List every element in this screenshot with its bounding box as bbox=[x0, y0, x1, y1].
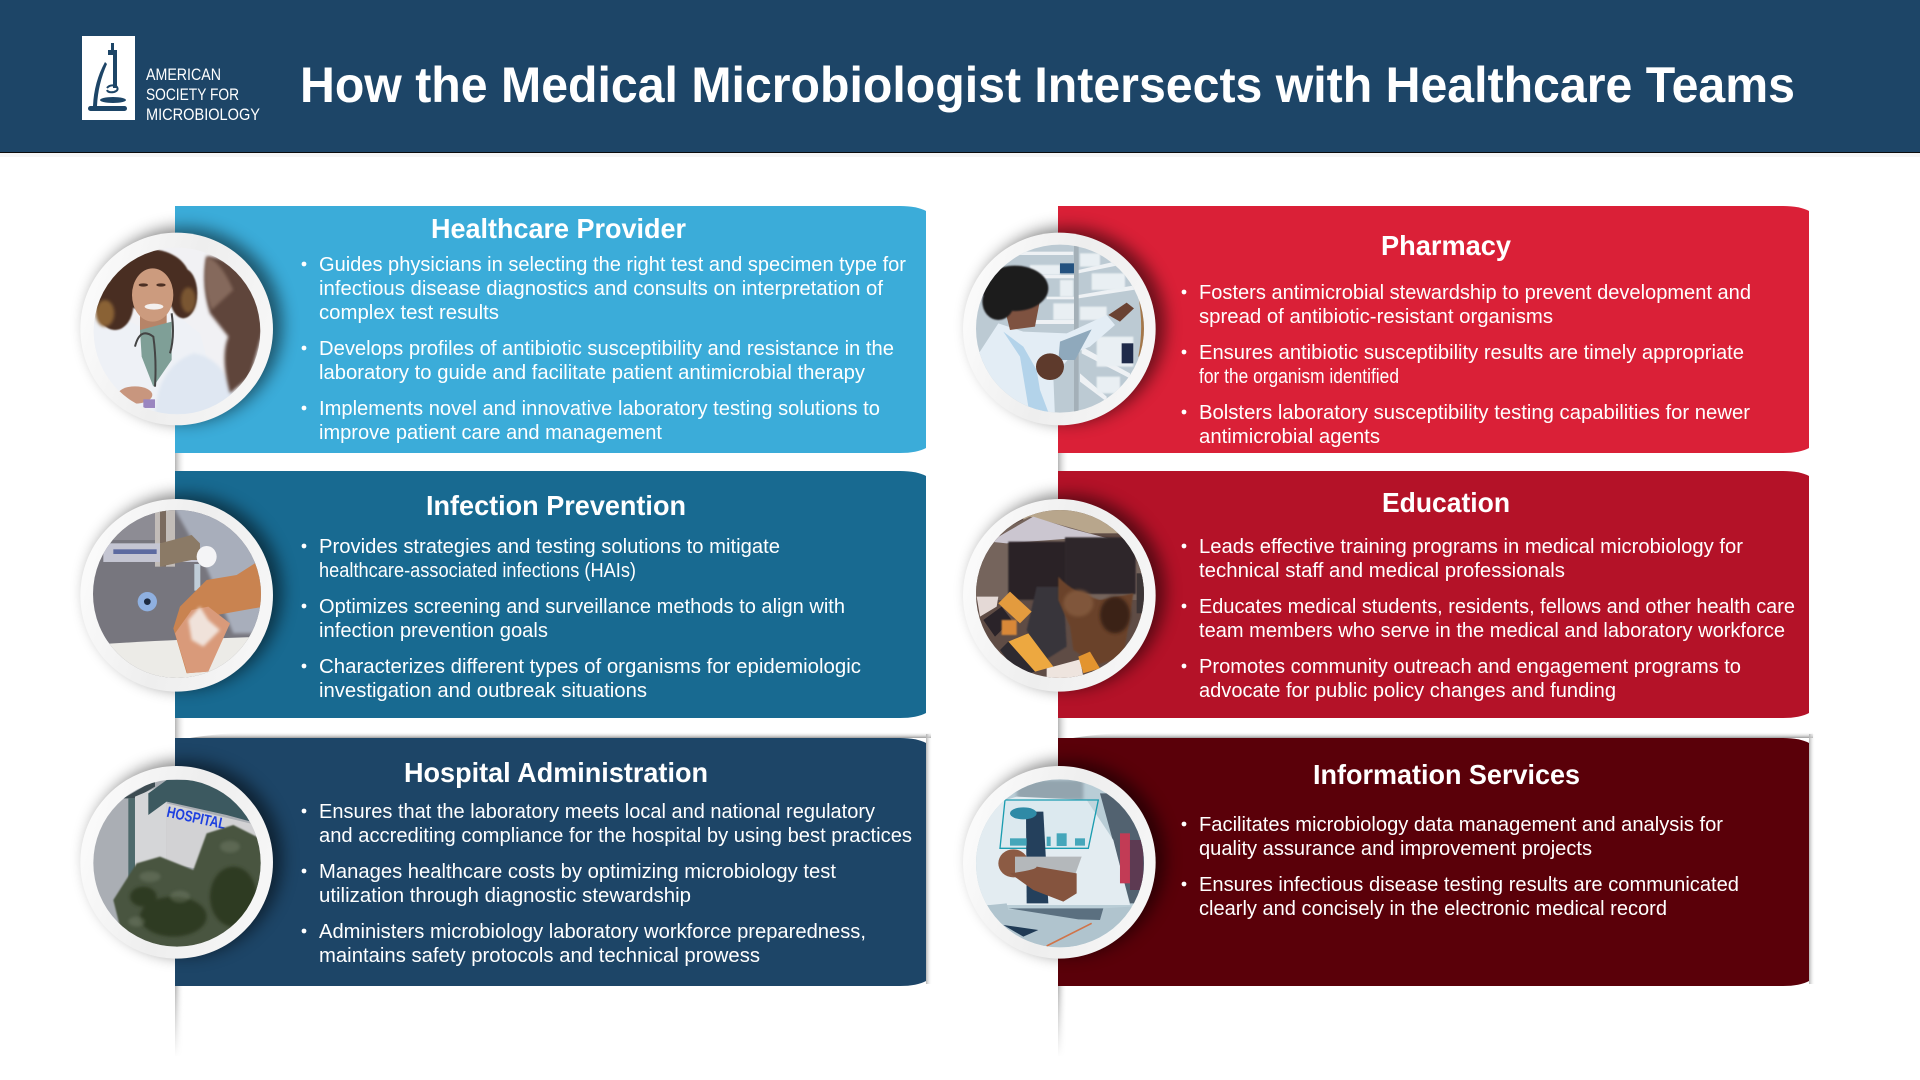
panel background bbox=[1058, 471, 1809, 718]
bullet list: and accrediting compliance for the hospital by using best practices bbox=[319, 824, 912, 847]
bullet list: Ensures that the laboratory meets local and national regulatory bbox=[319, 800, 876, 823]
logo: American Society for Microbiology bbox=[82, 36, 260, 124]
bullet list: Administers microbiology laboratory workforce preparedness, bbox=[319, 920, 866, 943]
icon: photo of smiling doctor with patient bbox=[80, 228, 282, 425]
icon: photo of hospital building behind trees: HOSPITAL bbox=[165, 804, 227, 833]
bullet list: Ensures infectious disease testing results are communicated bbox=[1199, 873, 1739, 896]
panel background bbox=[1058, 206, 1809, 453]
bullet list bbox=[302, 253, 906, 444]
heading: Hospital Administration bbox=[404, 757, 708, 788]
title: How the Medical Microbiologist Intersects with Healthcare Teams bbox=[300, 57, 1795, 113]
heading: Education bbox=[1382, 487, 1510, 518]
bullet list: Facilitates microbiology data management and analysis for bbox=[1199, 813, 1723, 836]
logo wordmark: AMERICAN bbox=[146, 66, 221, 84]
bullet list: Ensures antibiotic susceptibility results are timely appropriate bbox=[1199, 341, 1744, 364]
icon: photo of doctor holding tablet bbox=[963, 761, 1166, 959]
bullet list: Leads effective training programs in medical microbiology for bbox=[1199, 535, 1743, 558]
panel: Education bbox=[963, 471, 1809, 718]
bullet list: Characterizes different types of organisms for epidemiologic bbox=[319, 655, 861, 678]
bullet list bbox=[1182, 535, 1795, 702]
bullet list: quality assurance and improvement projects bbox=[1199, 837, 1592, 860]
panel: Hospital Administration bbox=[80, 738, 926, 986]
panel background bbox=[175, 738, 926, 986]
bullet list: maintains safety protocols and technical prowess bbox=[319, 944, 760, 967]
heading: Pharmacy bbox=[1381, 230, 1511, 261]
header banner bbox=[0, 0, 1920, 157]
heading: Healthcare Provider bbox=[431, 213, 686, 244]
icon: photo of pharmacist checking shelves bbox=[963, 228, 1166, 425]
panel background bbox=[1058, 738, 1809, 986]
bullet list: healthcare-associated infections (HAIs) bbox=[319, 559, 636, 582]
bullet list: clearly and concisely in the electronic medical record bbox=[1199, 897, 1667, 920]
bullet list: team members who serve in the medical and laboratory workforce bbox=[1199, 619, 1785, 642]
bullet list: Provides strategies and testing solutions to mitigate bbox=[319, 535, 780, 558]
bullet list bbox=[1182, 281, 1751, 448]
bullet list: investigation and outbreak situations bbox=[319, 679, 647, 702]
bullet list: infection prevention goals bbox=[319, 619, 548, 642]
bullet list: Manages healthcare costs by optimizing microbiology test bbox=[319, 860, 836, 883]
bullet list: Guides physicians in selecting the right test and specimen type for bbox=[319, 253, 906, 276]
panel background bbox=[175, 206, 926, 453]
bullet list: antimicrobial agents bbox=[1199, 425, 1380, 448]
bullet list: advocate for public policy changes and funding bbox=[1199, 679, 1616, 702]
bullet list: Optimizes screening and surveillance methods to align with bbox=[319, 595, 845, 618]
bullet list: complex test results bbox=[319, 301, 499, 324]
bullet list: utilization through diagnostic stewardship bbox=[319, 884, 691, 907]
logo wordmark: SOCIETY FOR bbox=[146, 86, 239, 104]
panel background bbox=[175, 471, 926, 718]
icon: photo of hospital building behind trees bbox=[80, 761, 282, 959]
heading: Infection Prevention bbox=[426, 490, 686, 521]
panel: Infection Prevention bbox=[80, 471, 926, 718]
panel: Pharmacy bbox=[963, 206, 1809, 453]
icon: photo of hand washing under faucet bbox=[80, 494, 282, 692]
bullet list: Fosters antimicrobial stewardship to prevent development and bbox=[1199, 281, 1751, 304]
heading: Information Services bbox=[1313, 759, 1580, 790]
bullet list: technical staff and medical professionals bbox=[1199, 559, 1565, 582]
bullet list: for the organism identified bbox=[1199, 365, 1399, 388]
logo wordmark: MICROBIOLOGY bbox=[146, 106, 260, 124]
panel: Healthcare Provider bbox=[80, 206, 926, 453]
bullet list bbox=[302, 800, 912, 967]
bullet list: spread of antibiotic-resistant organisms bbox=[1199, 305, 1553, 328]
column shadows bbox=[170, 453, 1815, 1058]
icon: microscope bbox=[82, 36, 135, 120]
bullet list: Educates medical students, residents, fellows and other health care bbox=[1199, 595, 1795, 618]
bullet list: Promotes community outreach and engagement programs to bbox=[1199, 655, 1741, 678]
panel: Information Services bbox=[963, 738, 1809, 986]
bullet list bbox=[1182, 813, 1739, 920]
logo wordmark bbox=[146, 66, 260, 124]
bullet list: laboratory to guide and facilitate patient antimicrobial therapy bbox=[319, 361, 866, 384]
bullet list: infectious disease diagnostics and consults on interpretation of bbox=[319, 277, 883, 300]
bullet list: Bolsters laboratory susceptibility testing capabilities for newer bbox=[1199, 401, 1750, 424]
bullet list bbox=[302, 535, 861, 702]
bullet list: improve patient care and management bbox=[319, 421, 662, 444]
bullet list: Implements novel and innovative laboratory testing solutions to bbox=[319, 397, 880, 420]
icon: photo of graduates in caps bbox=[963, 494, 1166, 692]
bullet list: Develops profiles of antibiotic susceptibility and resistance in the bbox=[319, 337, 894, 360]
